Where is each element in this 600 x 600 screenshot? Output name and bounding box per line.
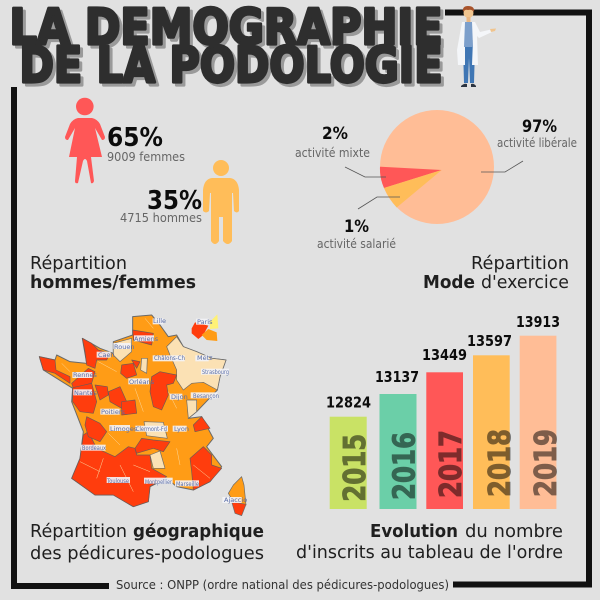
map city names: Strasbourg (202, 368, 229, 376)
map city names (73, 317, 247, 504)
map city names: Dijon (171, 393, 188, 401)
heading: géographique: géographique (133, 522, 264, 542)
bar 2015 (326, 394, 373, 509)
pie label: salarié (317, 217, 396, 251)
heading: géographique (30, 522, 264, 564)
map city names: Metz (197, 354, 213, 362)
pie label: mixte (295, 124, 370, 160)
stat: men: 4715 hommes (120, 210, 202, 225)
heading: evolution: d'inscrits au tableau de l'ordre (296, 543, 563, 563)
map city names: Marseille (176, 480, 199, 488)
map city names: Châlons-Ch (154, 354, 185, 362)
bar 2019 (516, 313, 564, 509)
pie label: salarié: activité salarié (317, 236, 396, 251)
bar 2015: 2015 (338, 434, 373, 502)
stat: men: 35% (147, 186, 202, 216)
stat: women: 9009 femmes (107, 149, 185, 164)
title: LA DEMOGRAPHIE (10, 0, 442, 56)
heading: evolution: Evolution (370, 522, 458, 542)
map city names: Lyon (174, 425, 189, 433)
pie label: salarié: 1% (344, 217, 369, 237)
city labels (72, 318, 242, 503)
map city names: Montpellier (145, 478, 172, 486)
map city names: Clermont-Fd (136, 425, 167, 433)
bar 2016: 2016 (388, 432, 422, 500)
bar 2019: 13913 (516, 313, 560, 331)
icon: woman (65, 98, 105, 183)
title: DE LA PODOLOGIE (22, 40, 446, 97)
Corsica (228, 477, 246, 516)
stat: women (107, 123, 185, 164)
title (10, 0, 446, 97)
map city names: Ajaccio (224, 496, 247, 504)
map city names: Bordeaux (82, 444, 106, 452)
heading: hommes/femmes: hommes/femmes (30, 273, 196, 293)
title: LA DEMOGRAPHIE (12, 2, 446, 59)
heading: evolution (296, 522, 563, 563)
icon: man (203, 160, 239, 244)
heading: géographique: Répartition (30, 522, 127, 542)
map city names: Caen (98, 351, 115, 359)
bar 2018 (467, 332, 518, 509)
map city names: Orléans (129, 378, 155, 386)
stat: men (120, 186, 202, 225)
pie label: libérale: 97% (522, 117, 557, 137)
map city names: Poitiers (101, 408, 125, 416)
heading: géographique: des pédicures-podologues (30, 544, 264, 564)
bar chart (326, 313, 564, 509)
bar 2019: 2019 (529, 429, 564, 497)
pie label: libérale (497, 117, 577, 150)
pie label: mixte: activité mixte (295, 145, 370, 160)
heading: evolution: du nombre (465, 522, 563, 542)
bar 2016 (375, 368, 422, 509)
map city names: Besançon (193, 392, 219, 400)
bar 2016: 13137 (375, 368, 419, 386)
map city names: Amiens (134, 335, 159, 343)
map city names: Rouen (114, 343, 134, 351)
pie label: libérale: activité libérale (497, 135, 577, 150)
map city names: Limoges (110, 425, 138, 433)
bar 2015: 12824 (326, 394, 371, 412)
map city names: Nantes (74, 389, 98, 397)
map city names: Toulouse (106, 477, 129, 485)
bar 2018: 13597 (467, 332, 512, 350)
pie chart (345, 110, 523, 224)
map city names: Rennes (73, 371, 97, 379)
heading: mode d'exercice (423, 254, 569, 293)
bar 2017: 2017 (434, 430, 469, 498)
bar 2018: 2018 (483, 429, 518, 497)
title: DE LA PODOLOGIE (20, 37, 442, 94)
map city names: Paris (197, 318, 213, 326)
map of France (39, 314, 246, 516)
bar 2017 (422, 346, 469, 509)
pie label: mixte: 2% (322, 124, 348, 144)
stat: women: 65% (107, 123, 163, 153)
heading: mode d'exercice: Mode (423, 273, 475, 293)
map city names: Lille (153, 317, 166, 325)
heading: mode d'exercice: d'exercice (481, 273, 569, 293)
heading: hommes/femmes (30, 254, 196, 293)
heading: hommes/femmes: Répartition (30, 254, 127, 274)
source: Source : ONPP (ordre national des pédicures-podologues) (116, 577, 449, 592)
icon: doctor (457, 6, 496, 87)
heading: mode d'exercice: Répartition (471, 254, 569, 274)
Paris inset (192, 314, 218, 341)
bar 2017: 13449 (422, 346, 467, 364)
